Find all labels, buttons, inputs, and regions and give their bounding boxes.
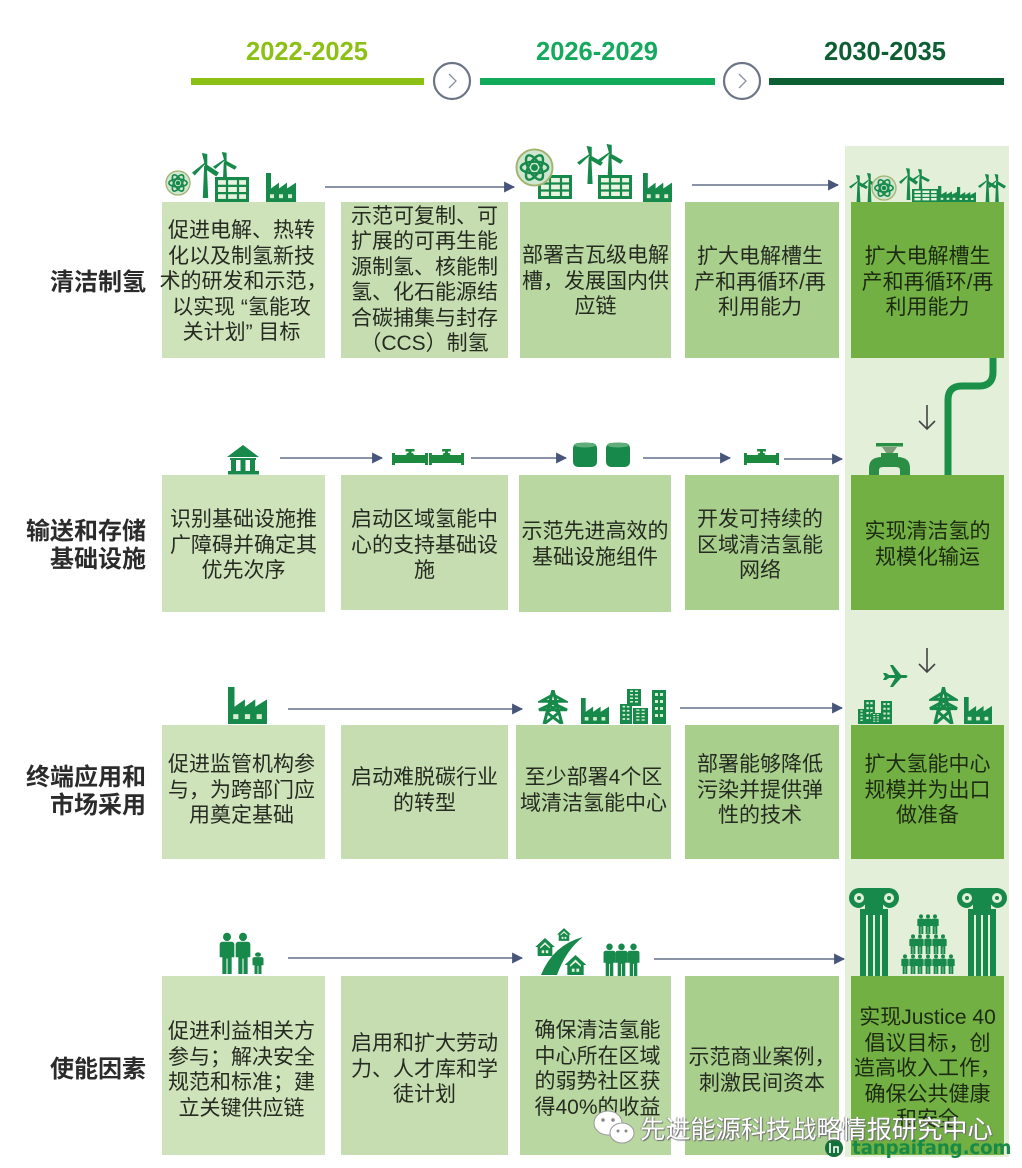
panel: 市场采用 box 4: 部署能够降低	[697, 753, 823, 776]
icon: large valve	[869, 443, 910, 475]
panel: 使能因素 box 2: 启用和扩大劳动	[351, 1032, 498, 1055]
row label: 输送和存储基础设施	[26, 518, 146, 573]
icon: wechat watermark	[594, 1111, 634, 1143]
timeline heading 2030-2035: 2030-2035	[824, 38, 946, 66]
panel: 使能因素 box 3: 的弱势社区获	[534, 1070, 660, 1093]
icon: atom, panels, turbines, factory (col 3)	[516, 144, 672, 202]
panel: 清洁制氢 box 3	[520, 202, 671, 358]
icon: road and houses	[535, 928, 586, 975]
panel: 市场采用 box 4: 性的技术	[718, 804, 802, 827]
panel: 使能因素 box 3	[520, 976, 671, 1155]
row label: 输送和存储基础设施: 输送和存储	[26, 518, 146, 545]
panel: 基础设施 box 4	[685, 475, 839, 610]
panel: 使能因素 box 5: 和安全	[896, 1108, 959, 1131]
panel: 基础设施 box 1: 广障碍并确定其	[170, 534, 317, 556]
panel: 市场采用 box 1: 用奠定基础	[189, 804, 294, 827]
panel: 基础设施 box 3: 基础设施组件	[532, 546, 658, 568]
panel: 使能因素 box 5: 造高收入工作，	[854, 1057, 1001, 1080]
panel: 基础设施 box 3	[519, 475, 671, 612]
icon: storage tanks	[573, 442, 630, 467]
icon: pipeline	[948, 358, 993, 475]
panel: 清洁制氢 box 5	[851, 202, 1004, 358]
icon: government building	[227, 445, 259, 474]
panel: 基础设施 box 5: 实现清洁氢的	[864, 520, 990, 543]
panel: 使能因素 box 4	[685, 976, 839, 1155]
panel: 使能因素 box 1: 规范和标准；建	[168, 1071, 315, 1094]
panel: 市场采用 box 3: 至少部署4个区	[525, 766, 662, 789]
panel: 清洁制氢 box 4	[685, 202, 839, 358]
icon: atom, turbines, solar panel, factory (col 1)	[166, 152, 296, 202]
panel: 清洁制氢 box 2	[341, 202, 508, 358]
row label: 终端应用和市场采用	[26, 764, 146, 819]
row label: 输送和存储基础设施: 基础设施	[50, 546, 146, 573]
panel: 基础设施 box 1: 优先次序	[202, 559, 286, 582]
icon: tanpaifang logo	[825, 1139, 843, 1157]
panel: 市场采用 box 5: 做准备	[896, 804, 959, 827]
icon: double pipe valves	[392, 449, 464, 465]
icon: buildings, tower, factory (col 5)	[858, 687, 992, 724]
panel: 市场采用 box 5: 扩大氢能中心	[864, 753, 990, 776]
timeline bar 2022-2025	[191, 78, 424, 85]
panel: 基础设施 box 2: 心的支持基础设	[351, 534, 498, 556]
timeline bar 2026-2029	[480, 78, 715, 85]
panel: 清洁制氢 box 4: 扩大电解槽生	[697, 245, 823, 268]
panel: 使能因素 box 5: 倡议目标，创	[864, 1032, 990, 1054]
icon: tower, factory, buildings (col 3)	[539, 689, 666, 724]
panel: 使能因素 box 2	[341, 976, 508, 1155]
panel: 清洁制氢 box 3: 应链	[574, 295, 616, 318]
arrows row 2	[280, 458, 842, 459]
panel: 市场采用 box 2: 的转型	[393, 792, 456, 814]
icon: factory large	[228, 687, 267, 724]
timeline heading 2026-2029: 2026-2029	[536, 38, 658, 66]
timeline heading 2022-2025: 2022-2025	[246, 38, 368, 66]
panel: 清洁制氢 box 2: 氢、化石能源结	[351, 281, 498, 304]
panel: 使能因素 box 2: 徒计划	[393, 1083, 456, 1106]
icon: single pipe valve	[744, 449, 779, 465]
panel: 基础设施 box 2: 启动区域氢能中	[351, 508, 498, 531]
panel: 清洁制氢 box 3: 部署吉瓦级电解	[522, 244, 669, 267]
panel: 使能因素 box 4: 示范商业案例，	[688, 1046, 836, 1069]
panel: 清洁制氢 box 5: 利用能力	[886, 296, 970, 319]
panel: 市场采用 box 3	[516, 725, 671, 859]
icon: columns	[849, 888, 1007, 976]
panel: 市场采用 box 5: 规模并为出口	[864, 778, 990, 802]
icon: turbines, atom, panel and factories (col 5)	[849, 168, 1006, 202]
connector circle 2	[724, 63, 760, 99]
panel: 清洁制氢 box 4: 利用能力	[718, 296, 802, 319]
highlight column background 2030-2035	[845, 146, 1009, 1157]
panel: 基础设施 box 5: 规模化输运	[875, 546, 980, 568]
icon: people pyramid	[901, 914, 955, 974]
panel: 清洁制氢 box 5: 产和再循环/再	[862, 270, 993, 294]
panel: 市场采用 box 4: 污染并提供弹	[697, 778, 823, 802]
panel: 使能因素 box 3: 确保清洁氢能	[534, 1019, 660, 1042]
watermark text: 先进能源科技战略情报研究中心	[640, 1116, 993, 1144]
panel: 基础设施 box 4: 网络	[739, 559, 781, 582]
panel: 市场采用 box 2: 启动难脱碳行业	[351, 766, 498, 789]
connector circle 1	[434, 63, 470, 99]
panel: 基础设施 box 1	[162, 475, 325, 612]
timeline bar 2030-2035	[769, 78, 1004, 85]
icon: family	[220, 933, 264, 974]
panel: 使能因素 box 5: 确保公共健康	[864, 1082, 990, 1106]
panel: 使能因素 box 5	[851, 976, 1004, 1155]
row label: 终端应用和市场采用: 终端应用和	[26, 764, 146, 791]
watermark url: tanpaifang.com	[852, 1138, 1011, 1159]
panel: 使能因素 box 1: 参与；解决安全	[168, 1046, 315, 1068]
row label: 清洁制氢: 清洁制氢	[50, 269, 146, 296]
arrow: down 2	[919, 648, 935, 672]
panel: 使能因素 box 1	[162, 976, 325, 1155]
panel: 清洁制氢 box 1: 术的研发和示范，	[160, 270, 328, 293]
panel: 市场采用 box 2	[341, 725, 508, 859]
panel: 清洁制氢 box 2: 源制氢、核能制	[351, 256, 498, 278]
arrow: down 1	[919, 405, 935, 429]
panel: 使能因素 box 2: 力、人才库和学	[351, 1058, 498, 1080]
panel: 清洁制氢 box 2: 扩展的可再生能	[351, 230, 498, 253]
panel: 基础设施 box 4: 开发可持续的	[697, 508, 823, 531]
panel: 清洁制氢 box 1: 关计划” 目标	[183, 321, 300, 344]
icon: airplane	[883, 665, 908, 687]
panel: 基础设施 box 1: 识别基础设施推	[170, 508, 317, 531]
panel: 市场采用 box 3: 域清洁氢能中心	[520, 792, 667, 814]
panel: 使能因素 box 3: 得40%的收益	[534, 1096, 661, 1118]
arrows row 3	[288, 708, 842, 709]
panel: 基础设施 box 2: 施	[414, 559, 435, 582]
arrows row 4	[288, 958, 844, 959]
panel: 使能因素 box 4: 刺激民间资本	[699, 1072, 825, 1094]
panel: 基础设施 box 3: 示范先进高效的	[522, 520, 668, 543]
panel: 使能因素 box 1: 立关键供应链	[178, 1096, 304, 1120]
panel: 清洁制氢 box 2: 示范可复制、可	[351, 204, 498, 228]
panel: 清洁制氢 box 1: 促进电解、热转	[168, 219, 315, 242]
panel: 基础设施 box 4: 区域清洁氢能	[697, 534, 823, 556]
row label: 使能因素: 使能因素	[50, 1056, 146, 1083]
row label: 终端应用和市场采用: 市场采用	[50, 792, 146, 819]
panel: 市场采用 box 1: 促进监管机构参	[168, 753, 315, 776]
panel: 清洁制氢 box 4: 产和再循环/再	[694, 270, 826, 294]
panel: 市场采用 box 4	[685, 725, 839, 859]
panel: 市场采用 box 1: 与，为跨部门应	[168, 778, 315, 802]
panel: 使能因素 box 5: 实现Justice 40	[859, 1006, 996, 1029]
panel: 市场采用 box 1	[162, 725, 325, 859]
panel: 使能因素 box 3: 中心所在区域	[534, 1044, 660, 1068]
panel: 清洁制氢 box 1: 以实现 “氢能攻	[172, 296, 311, 318]
arrows row 1	[325, 185, 838, 187]
panel: 市场采用 box 5	[851, 725, 1004, 859]
panel: 清洁制氢 box 2: （CCS）制氢	[360, 332, 489, 355]
panel: 清洁制氢 box 1: 化以及制氢新技	[168, 244, 315, 268]
panel: 使能因素 box 1: 促进利益相关方	[168, 1020, 315, 1043]
panel: 基础设施 box 2	[341, 475, 508, 610]
panel: 清洁制氢 box 3: 槽，发展国内供	[522, 270, 669, 292]
panel: 清洁制氢 box 5: 扩大电解槽生	[864, 245, 990, 268]
panel: 清洁制氢 box 2: 合碳捕集与封存	[351, 306, 498, 330]
icon: people group	[604, 944, 639, 976]
panel: 清洁制氢 box 1	[162, 202, 325, 358]
panel: 基础设施 box 5	[851, 475, 1004, 610]
